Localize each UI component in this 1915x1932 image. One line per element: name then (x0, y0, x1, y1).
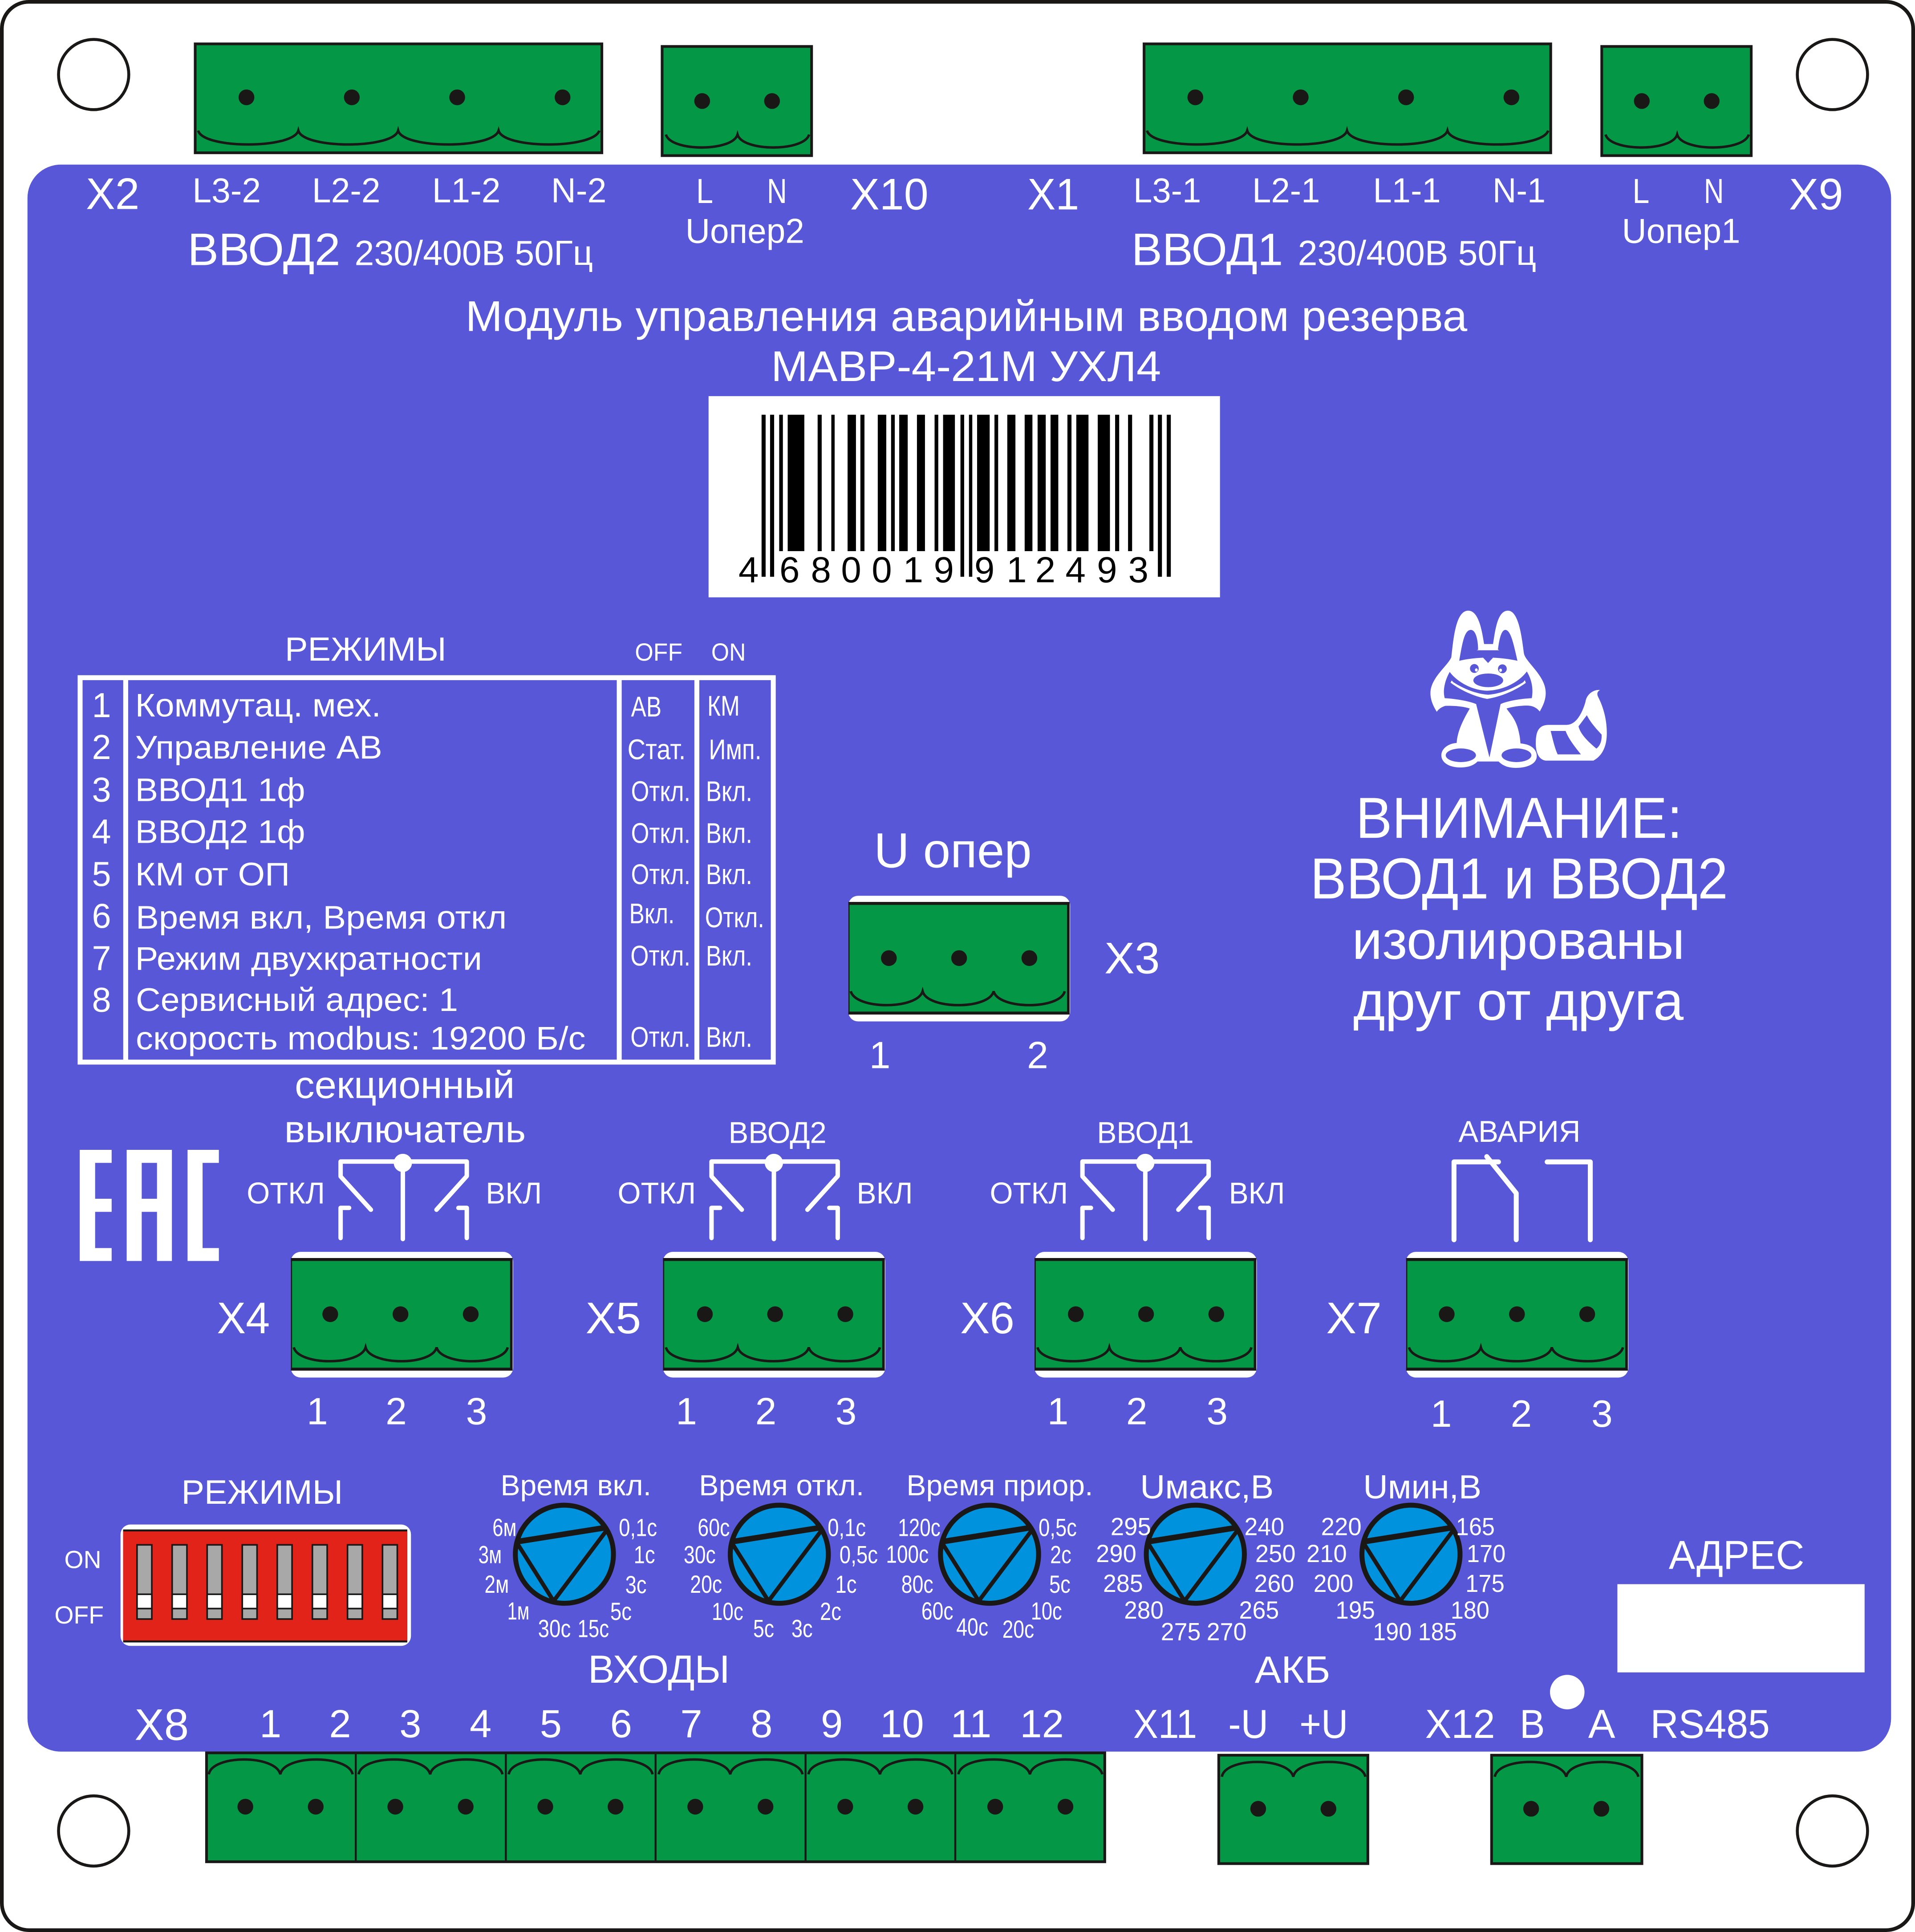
knob: Время откл.: Время откл. (699, 1469, 864, 1502)
table: ON column: Вкл. (706, 940, 752, 972)
knob: Время вкл.: 3с (625, 1571, 647, 1599)
table: ON column (705, 690, 764, 1053)
indicator LED (1550, 1675, 1585, 1709)
DIP switch block (121, 1525, 411, 1646)
table: ON column: Вкл. (706, 776, 752, 808)
knob: Uмакс,В: 280 (1124, 1596, 1164, 1624)
table: OFF column: Откл. (630, 940, 690, 972)
connector X8 (207, 1752, 1105, 1862)
X4 labels: X4 (217, 1294, 270, 1343)
X6 labels: 1 (1047, 1390, 1068, 1433)
top labels: input 1 terminals: N-1 (1493, 171, 1546, 210)
X11 and X12 terminal labels: X12 (1425, 1701, 1495, 1747)
X7 labels (1326, 1294, 1613, 1435)
X8 terminal labels: 3 (399, 1702, 421, 1746)
table: ON column: Откл. (705, 902, 764, 934)
top labels: input 1 terminals: ВВОД1 (1132, 224, 1283, 275)
table: ON column: Вкл. (706, 1021, 752, 1053)
table: ON column: Имп. (709, 734, 762, 765)
top labels: input 2 terminals: N-2 (551, 171, 607, 210)
X3 labels: X3 (1104, 934, 1160, 983)
top labels: Uопер2 (686, 170, 929, 250)
table: OFF column (628, 691, 690, 1053)
table: mode names: ВВОД2 1ф (135, 813, 305, 850)
knob: Uмакс,В: 295 (1111, 1513, 1151, 1540)
X6 labels (960, 1294, 1228, 1433)
warning text: изолированы (1352, 910, 1685, 970)
knob: Время приор.: 0,5с (1039, 1514, 1077, 1542)
table: switch numbers (92, 686, 111, 1019)
sectional switch heading: секционный (295, 1064, 515, 1107)
X8 terminal labels: 11 (950, 1702, 991, 1746)
X5 heading: ВВОД2 (729, 1116, 827, 1150)
table: switch numbers: 8 (92, 981, 111, 1019)
knob: Время откл.: 30с (684, 1541, 716, 1568)
knob: Время вкл.: 15с (578, 1615, 609, 1643)
X7 labels: 3 (1591, 1392, 1613, 1435)
top labels: input 2 terminals: 230/400В 50Гц (354, 234, 593, 273)
knob: Uмин,В: 165 (1456, 1513, 1495, 1540)
sectional switch heading (284, 1064, 526, 1151)
X6 relay schematic (1083, 1156, 1209, 1239)
modes table (80, 678, 773, 1062)
table: mode names (135, 687, 586, 1057)
top labels: Uопер1: X9 (1789, 170, 1843, 219)
knob: Время вкл.: 1с (633, 1541, 655, 1569)
top labels: input 2 terminals (86, 170, 607, 275)
X7 labels: X7 (1326, 1294, 1382, 1343)
X7 labels: 1 (1431, 1392, 1452, 1435)
DIP ON/OFF labels (54, 1546, 104, 1629)
address white field (1617, 1584, 1865, 1672)
top labels: input 1 terminals (1027, 170, 1546, 275)
X6 switch labels (990, 1177, 1285, 1210)
connector X11 (1219, 1755, 1368, 1863)
knob: Время приор.: 80с (901, 1571, 933, 1598)
modes table heading: OFF (635, 638, 682, 666)
X5 labels: X5 (586, 1294, 641, 1343)
table: OFF column: АВ (631, 691, 661, 723)
connector X2 (195, 44, 602, 153)
table: mode names: ВВОД1 1ф (135, 772, 305, 808)
warning text (1310, 785, 1728, 1031)
knob: Uмин,В: 200 (1314, 1570, 1353, 1597)
table: switch numbers: 3 (92, 771, 111, 809)
X5 labels (586, 1294, 856, 1433)
X4 switch labels (247, 1177, 542, 1210)
X11 and X12 terminal labels (1133, 1701, 1770, 1747)
mounting hole: bottom left (58, 1796, 129, 1866)
table: OFF column: Откл. (630, 1021, 690, 1053)
knob: Uмин,В: 185 (1418, 1618, 1457, 1645)
X4 switch labels: ОТКЛ (247, 1177, 325, 1210)
table: switch numbers: 6 (92, 897, 111, 935)
table: mode names: Время вкл, Время откл (136, 899, 507, 936)
DIP ON/OFF labels: ON (65, 1546, 101, 1574)
connector X10 (662, 46, 811, 156)
X6 labels: 2 (1126, 1390, 1148, 1433)
top labels: Uопер2: Uопер2 (686, 212, 804, 250)
top labels: Uопер2: X10 (850, 170, 929, 219)
U oper label: U опер (874, 824, 1032, 878)
X11 and X12 terminal labels: A (1588, 1701, 1615, 1747)
knob: Время откл. (684, 1469, 878, 1643)
table: switch numbers: 1 (92, 686, 111, 725)
knob: Время вкл. (479, 1469, 657, 1643)
title: Модуль управления аварийным вводом резерва (466, 292, 1467, 341)
X4 switch labels: ВКЛ (486, 1177, 542, 1210)
knob: Uмин,В: 180 (1451, 1596, 1489, 1624)
table: OFF column: Стат. (628, 734, 686, 765)
X11 and X12 terminal labels: +U (1299, 1701, 1348, 1747)
knob: Uмин,В: 175 (1465, 1570, 1505, 1597)
X8 terminal labels: 9 (821, 1702, 843, 1746)
blue label panel (28, 165, 1891, 1752)
connector X5 (663, 1252, 885, 1377)
knob: Время приор.: 100с (886, 1540, 929, 1568)
top labels: input 1 terminals: L2-1 (1252, 171, 1320, 210)
barcode (709, 396, 1220, 597)
X7 heading: АВАРИЯ (1458, 1115, 1580, 1149)
mounting hole: bottom right (1797, 1796, 1867, 1866)
knob: Uмакс,В: 290 (1096, 1540, 1136, 1567)
modes table heading: ON (711, 638, 746, 666)
knob: Uмакс,В: 275 (1161, 1618, 1201, 1645)
knob: Время вкл.: 3м (479, 1541, 502, 1568)
table: OFF column: Откл. (631, 859, 690, 890)
knob: Время откл.: 3с (791, 1615, 813, 1643)
knob: Uмин,В: 195 (1335, 1596, 1375, 1624)
knob: Время откл.: 5с (753, 1615, 774, 1643)
X5 relay schematic (711, 1156, 838, 1239)
table: ON column: КМ (707, 690, 740, 722)
X7 labels: 2 (1511, 1392, 1532, 1435)
DIP ON/OFF labels: OFF (54, 1601, 104, 1629)
address label: АДРЕС (1669, 1532, 1804, 1578)
knob: Время откл.: 0,5с (840, 1541, 878, 1568)
knob: Uмин,В (1306, 1468, 1505, 1645)
top labels: input 1 terminals: 230/400В 50Гц (1298, 234, 1536, 273)
knob: Время приор.: 2с (1050, 1541, 1071, 1568)
knob: Время откл.: 2с (820, 1598, 841, 1625)
X3 labels: 1 (869, 1034, 890, 1077)
X5 labels: 2 (755, 1390, 776, 1433)
table: mode names: Коммутац. мех. (135, 687, 381, 724)
X4 labels (217, 1294, 487, 1433)
knob: Uмин,В: Uмин,В (1363, 1468, 1481, 1506)
X5 labels: 1 (676, 1390, 697, 1433)
X4 labels: 1 (307, 1390, 328, 1433)
inputs heading: ВХОДЫ (588, 1647, 730, 1691)
X4 labels: 3 (466, 1390, 487, 1433)
barcode: 4680019912493 (738, 550, 1148, 590)
knob: Время вкл.: 2м (485, 1571, 509, 1598)
knob: Время откл.: 0,1с (828, 1514, 866, 1542)
knob: Uмин,В: 170 (1467, 1540, 1505, 1567)
X8 terminal labels: 6 (610, 1702, 632, 1746)
knob: Uмин,В: 190 (1373, 1618, 1412, 1645)
warning text: друг от друга (1353, 971, 1684, 1031)
icon: fox logo (1430, 611, 1607, 768)
knob: Uмакс,В: 260 (1254, 1570, 1294, 1597)
top labels: input 2 terminals: ВВОД2 (187, 224, 341, 275)
table: switch numbers: 5 (92, 855, 111, 893)
table: OFF column: Откл. (631, 776, 690, 808)
top labels: Uопер2: L (696, 172, 713, 211)
knob: Время приор.: 60с (921, 1597, 953, 1625)
X8 terminal labels: 2 (329, 1702, 351, 1746)
modes table heading: РЕЖИМЫ (285, 630, 446, 668)
X8 terminal labels: 8 (751, 1702, 772, 1746)
X3 labels (869, 934, 1160, 1077)
top labels: input 2 terminals: L2-2 (312, 171, 381, 210)
table: ON column: Вкл. (706, 859, 752, 890)
knob: Время приор. (886, 1469, 1093, 1643)
knob: Uмакс,В (1096, 1468, 1296, 1645)
knob: Uмакс,В: 240 (1244, 1513, 1284, 1540)
table: switch numbers: 7 (92, 940, 111, 978)
table: ON column: Вкл. (706, 817, 752, 849)
top labels: input 2 terminals: L1-2 (432, 171, 500, 210)
top labels: input 2 terminals: L3-2 (192, 171, 261, 210)
knob: Время откл.: 60с (698, 1514, 730, 1542)
title: МАВР-4-21М УХЛ4 (771, 342, 1161, 390)
EAC mark (80, 1150, 219, 1261)
table: mode names: скорость modbus: 19200 Б/с (136, 1020, 586, 1057)
X8 terminal labels: 12 (1020, 1702, 1064, 1746)
X5 labels: 3 (836, 1390, 856, 1433)
top labels: input 1 terminals: L1-1 (1373, 171, 1441, 210)
top labels: Uопер2: N (767, 172, 787, 211)
X11 and X12 terminal labels: B (1520, 1701, 1545, 1747)
X5 switch labels: ОТКЛ (617, 1177, 696, 1210)
X8 terminal labels (134, 1700, 1064, 1749)
knob: Uмакс,В: 285 (1103, 1570, 1143, 1597)
warning text: ВВОД1 и ВВОД2 (1310, 846, 1728, 911)
X11 and X12 terminal labels: X11 (1133, 1701, 1197, 1747)
battery heading: АКБ (1255, 1648, 1331, 1691)
X4 labels: 2 (385, 1390, 407, 1433)
X6 labels: 3 (1206, 1390, 1228, 1433)
table: mode names: КМ от ОП (135, 856, 290, 893)
X6 switch labels: ОТКЛ (990, 1177, 1068, 1210)
DIP switch heading: РЕЖИМЫ (181, 1473, 343, 1511)
table: mode names: Сервисный адрес: 1 (136, 982, 458, 1018)
knob: Время приор.: 20с (1002, 1615, 1034, 1643)
knob: Время приор.: 120с (898, 1514, 941, 1542)
knob: Время вкл.: 0,1с (619, 1514, 657, 1542)
knob: Время приор.: 5с (1049, 1571, 1071, 1598)
top labels: Uопер1 (1622, 170, 1843, 250)
sectional switch heading: выключатель (284, 1108, 526, 1151)
X3 labels: 2 (1027, 1034, 1048, 1077)
top labels: input 1 terminals: X1 (1027, 170, 1079, 219)
X8 terminal labels: 5 (540, 1702, 562, 1746)
connector X1 (1144, 44, 1551, 153)
knob: Uмакс,В: 265 (1239, 1596, 1279, 1624)
X8 terminal labels: 10 (880, 1702, 924, 1746)
X11 and X12 terminal labels: -U (1228, 1701, 1268, 1747)
connector X9 (1602, 46, 1751, 156)
top labels: input 2 terminals: X2 (86, 170, 139, 219)
knob: Время откл.: 10с (712, 1598, 743, 1625)
table: mode names: Режим двухкратности (135, 941, 482, 977)
X5 switch labels: ВКЛ (857, 1177, 913, 1210)
modes table heading (285, 630, 746, 668)
knob: Uмин,В: 220 (1321, 1513, 1362, 1540)
knob: Время приор.: Время приор. (906, 1469, 1093, 1502)
knob: Время вкл.: Время вкл. (500, 1469, 651, 1502)
knob: Uмакс,В: 270 (1207, 1618, 1246, 1645)
top labels: input 1 terminals: L3-1 (1133, 171, 1201, 210)
top labels: Uопер1: N (1704, 172, 1724, 211)
table: switch numbers: 2 (92, 728, 111, 767)
X8 terminal labels: 4 (470, 1702, 491, 1746)
knob: Время вкл.: 30с (538, 1615, 571, 1643)
table: OFF column: Вкл. (629, 898, 674, 929)
knob: Время приор.: 40с (956, 1613, 988, 1641)
knob: Время откл.: 20с (690, 1571, 722, 1598)
top labels: Uопер1: L (1632, 172, 1649, 211)
knob: Uмакс,В: 250 (1255, 1540, 1296, 1567)
X6 labels: X6 (960, 1294, 1014, 1343)
table: OFF column: Откл. (631, 817, 690, 849)
X6 switch labels: ВКЛ (1229, 1177, 1285, 1210)
connector X12 (1492, 1755, 1642, 1863)
connector X7 (1406, 1252, 1628, 1377)
table: mode names: Управление АВ (135, 729, 382, 766)
X8 terminal labels: X8 (134, 1700, 189, 1749)
X8 terminal labels: 1 (260, 1702, 281, 1746)
connector X3 (848, 896, 1070, 1022)
X6 heading: ВВОД1 (1097, 1116, 1194, 1150)
X7 alarm relay schematic (1454, 1157, 1590, 1240)
knob: Время вкл.: 5с (610, 1598, 632, 1625)
X4 relay schematic (341, 1156, 467, 1239)
knob: Время вкл.: 1м (507, 1597, 529, 1625)
knob: Время откл.: 1с (835, 1571, 857, 1598)
knob: Uмакс,В: Uмакс,В (1140, 1468, 1274, 1506)
table: switch numbers: 4 (92, 813, 111, 851)
knob: Время приор.: 10с (1031, 1597, 1062, 1625)
mounting hole: top left (58, 40, 129, 110)
top labels: Uопер1: Uопер1 (1622, 212, 1740, 250)
knob: Uмин,В: 210 (1306, 1540, 1347, 1567)
connector X6 (1035, 1252, 1257, 1377)
mounting hole: top right (1797, 40, 1867, 110)
X11 and X12 terminal labels: RS485 (1650, 1701, 1770, 1747)
X8 terminal labels: 7 (680, 1702, 702, 1746)
title (466, 292, 1467, 390)
knob: Время вкл.: 6м (492, 1514, 516, 1542)
connector X4 (291, 1252, 513, 1377)
warning text: ВНИМАНИЕ: (1356, 785, 1682, 850)
X5 switch labels (617, 1177, 913, 1210)
